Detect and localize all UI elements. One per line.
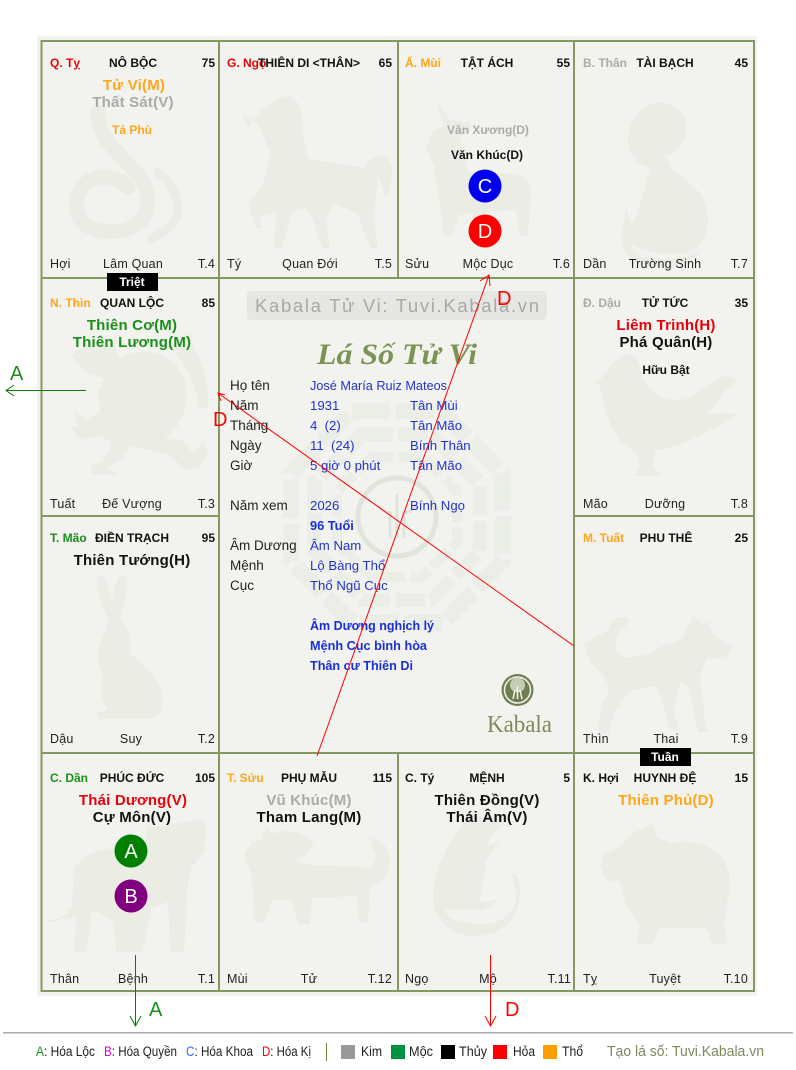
palace: Quan Lộc: T.3 <box>198 497 215 511</box>
badge B: B <box>124 886 138 908</box>
personal info table: 96 Tuổi <box>310 518 354 533</box>
palace: Mệnh: Mộ <box>479 972 497 986</box>
legend: Hóa Kị: D: Hóa Kị <box>262 1044 311 1059</box>
bagua watermark <box>291 411 503 623</box>
palace: Tài Bạch: T.7 <box>731 257 748 271</box>
palace: Tài Bạch <box>583 55 748 271</box>
bagua tree trunk <box>378 494 416 538</box>
palace: Tử Tức: Phá Quân(H) <box>619 334 713 351</box>
palace: Quan Lộc: N. Thìn <box>50 296 91 310</box>
site watermark banner: Kabala Tử Vi: Tuvi.Kabala.vn <box>255 295 539 316</box>
palace: Điền Trạch: 95 <box>202 531 215 545</box>
palace: Huynh Đệ <box>583 770 748 986</box>
palace: Điền Trạch: T. Mão <box>50 531 87 545</box>
legend swatch: Kim: Kim <box>361 1044 382 1059</box>
palace: Phúc Đức: Thân <box>50 972 79 986</box>
palace: Nô Bộc: T.4 <box>198 257 215 271</box>
palace: Phu Thê: Thai <box>653 732 679 746</box>
palace: Phúc Đức: T.1 <box>198 972 215 986</box>
legend swatch: Thổ <box>543 1044 583 1059</box>
zodiac watermark: rat <box>433 810 520 936</box>
palace: Nô Bộc: Q. Tỵ <box>50 56 80 70</box>
palace: Nô Bộc: Tả Phù <box>112 123 152 137</box>
palace: Quan Lộc: Thiên Cơ(M) <box>87 317 177 334</box>
palace: Phụ Mẫu <box>227 770 392 986</box>
palace: Phúc Đức <box>50 770 215 986</box>
personal info table: Thân cư Thiên Di <box>310 658 413 673</box>
palace: Nô Bộc <box>50 55 215 271</box>
palace: Điền Trạch: Thiên Tướng(H) <box>74 552 190 569</box>
personal info table: 2026 <box>310 498 339 513</box>
personal info table: 4 (2) <box>310 418 341 433</box>
zodiac watermark: tiger <box>48 818 206 952</box>
palace: Điền Trạch: ĐIỀN TRẠCH <box>95 530 169 545</box>
palace: Thiên Di: G. Ngọ <box>227 56 266 70</box>
personal info table: Họ tên <box>230 378 270 393</box>
palace: Tật Ách: T.6 <box>553 257 570 271</box>
palace: Phụ Mẫu: Tham Lang(M) <box>257 809 361 826</box>
personal info table: Âm Dương <box>230 538 297 553</box>
arrow label D bottom: D <box>505 999 519 1021</box>
personal info table: Ngày <box>230 438 262 453</box>
palace: Phu Thê: Thìn <box>583 732 609 746</box>
palace: Mệnh: MỆNH <box>469 770 505 785</box>
palace: Huynh Đệ: Tỵ <box>583 972 598 986</box>
palace: Tật Ách: Sửu <box>405 257 429 271</box>
palace: Phu Thê: PHU THÊ <box>640 530 692 545</box>
palace: Nô Bộc: Thất Sát(V) <box>92 94 174 111</box>
legend swatch: Thủy: Thủy <box>459 1044 487 1059</box>
badge C: C <box>478 176 492 198</box>
palace: Tật Ách <box>405 55 570 271</box>
bagua centre medallion <box>358 478 436 556</box>
palace: Quan Lộc: Đế Vượng <box>102 497 162 511</box>
personal info table: Mệnh Cục bình hòa <box>310 638 428 653</box>
palace: Phúc Đức: 105 <box>195 771 215 785</box>
palace: Huynh Đệ: Thiên Phủ(D) <box>618 792 714 809</box>
personal info table: Tân Mão <box>410 418 462 433</box>
Kabala logo <box>487 674 552 738</box>
palace: Phu Thê: T.9 <box>731 732 748 746</box>
palace: Phúc Đức: Cự Môn(V) <box>93 809 171 826</box>
palace: Điền Trạch: T.2 <box>198 732 215 746</box>
personal info table: Âm Dương nghịch lý <box>310 618 435 633</box>
palace: Thiên Di: 65 <box>379 56 392 70</box>
zodiac watermark: dog <box>584 614 732 734</box>
palace: Tật Ách: TẬT ÁCH <box>461 55 513 70</box>
palace: Tài Bạch: 45 <box>735 56 748 70</box>
Kabala logo: Kabala <box>487 712 552 738</box>
arrow: red diagonal to Tật Ách <box>317 275 490 756</box>
zodiac watermark: dragon <box>70 336 208 474</box>
palace: Tử Tức: Hữu Bật <box>642 363 690 377</box>
palace: Điền Trạch: Dậu <box>50 732 74 746</box>
palace: Quan Lộc: QUAN LỘC <box>100 295 164 310</box>
grid lines <box>41 41 754 991</box>
arrow: green left <box>6 385 86 396</box>
personal info table: Tháng <box>230 418 268 433</box>
personal info table: Năm xem <box>230 498 288 513</box>
palace: Phúc Đức: Bệnh <box>118 972 148 986</box>
bagua middle ring <box>314 434 480 600</box>
arrow label D top: D <box>497 288 511 310</box>
palace: Quan Lộc <box>50 295 215 511</box>
tag: Tuần <box>640 748 691 766</box>
palace: Phu Thê: 25 <box>735 531 748 545</box>
palace: Tử Tức: Liêm Trinh(H) <box>616 317 716 334</box>
palace: Phụ Mẫu: Vũ Khúc(M) <box>266 792 352 809</box>
personal info table: Cục <box>230 578 254 593</box>
site credit: Tạo lá số: Tuvi.Kabala.vn <box>607 1044 764 1060</box>
title: Lá Số Tử Vi <box>316 338 478 371</box>
palace: Tài Bạch: B. Thân <box>583 56 627 70</box>
palace: Huynh Đệ: T.10 <box>724 972 748 986</box>
footer legend <box>36 1043 764 1061</box>
legend swatch: Mộc: Mộc <box>409 1044 433 1059</box>
palace: Phúc Đức: Thái Dương(V) <box>79 792 187 809</box>
tag: Triệt <box>107 273 158 291</box>
legend swatch: Kim <box>341 1044 382 1059</box>
palace: Tật Ách: Mộc Dục <box>463 257 513 271</box>
arrow label D centre: D <box>213 409 227 431</box>
palace: Điền Trạch <box>50 530 215 746</box>
personal info table: 11 (24) <box>310 438 354 453</box>
palace: Huynh Đệ: 15 <box>735 771 748 785</box>
palace: Tử Tức: Mão <box>583 497 608 511</box>
badge A <box>114 834 148 868</box>
palace: Tử Tức <box>583 295 748 511</box>
palace: Mệnh: Ngọ <box>405 972 429 986</box>
personal info table: 5 giờ 0 phút <box>310 458 381 473</box>
personal info table: Mệnh <box>230 558 264 573</box>
legend swatch: Thổ: Thổ <box>562 1044 583 1059</box>
personal info table: Năm <box>230 398 259 413</box>
palace: Phụ Mẫu: T. Sửu <box>227 771 264 785</box>
palace: Phu Thê: M. Tuất <box>583 531 624 545</box>
personal info table: Bính Ngọ <box>410 498 465 513</box>
legend: Hóa Lộc: A: Hóa Lộc <box>36 1044 95 1059</box>
zodiac watermark: goat <box>426 102 531 236</box>
palace: Tật Ách: Văn Xương(D) <box>447 123 529 137</box>
palace: Phúc Đức: C. Dần <box>50 771 88 785</box>
personal info table <box>230 378 471 673</box>
palace: Mệnh <box>405 770 571 986</box>
palace: Nô Bộc: 75 <box>202 56 215 70</box>
badge B <box>114 880 148 912</box>
palace: Thiên Di: THIÊN DI <THÂN> <box>258 55 360 70</box>
palace: Phụ Mẫu: PHỤ MẪU <box>281 770 337 785</box>
personal info table: José María Ruiz Mateos <box>310 378 447 393</box>
badge C <box>468 170 502 202</box>
zodiac watermark: rabbit <box>96 575 162 719</box>
palace: Điền Trạch: Suy <box>120 732 143 746</box>
personal info table: Tân Mão <box>410 458 462 473</box>
palace: Tật Ách: 55 <box>557 56 570 70</box>
legend swatch: Mộc <box>391 1044 433 1059</box>
palace: Tử Tức: T.8 <box>731 497 748 511</box>
arrow: green down <box>130 955 141 1026</box>
badge D: D <box>478 221 492 243</box>
palace: Huynh Đệ: K. Hợi <box>583 771 619 785</box>
legend: Hóa Khoa: C: Hóa Khoa <box>186 1044 253 1059</box>
palace: Nô Bộc: Tử Vi(M) <box>103 77 165 94</box>
palace: Phúc Đức: PHÚC ĐỨC <box>100 770 165 785</box>
legend swatch: Thủy <box>441 1044 487 1059</box>
palace: Tài Bạch: Dần <box>583 257 607 271</box>
tag: Triệt: Triệt <box>119 275 145 289</box>
palace: Mệnh: 5 <box>563 771 570 785</box>
palace: Phụ Mẫu: 115 <box>373 771 392 785</box>
zodiac watermark: ox <box>244 826 390 924</box>
bagua outer ring <box>291 411 503 623</box>
palace: Tật Ách: Ấ. Mùi <box>405 55 441 70</box>
palace: Thiên Di: Quan Đới <box>282 257 338 271</box>
arrow label A left: A <box>10 363 24 385</box>
palace: Nô Bộc: Hợi <box>50 257 71 271</box>
zodiac watermark: monkey <box>622 103 708 266</box>
personal info table: Bính Thân <box>410 438 471 453</box>
palace: Phụ Mẫu: Tử <box>301 972 317 986</box>
palace: Thiên Di <box>227 55 392 271</box>
zodiac watermark: snake <box>76 112 178 238</box>
zodiac watermark: dragon tail <box>170 333 208 409</box>
palace: Nô Bộc: Lâm Quan <box>103 257 163 271</box>
palace: Tài Bạch: Trường Sinh <box>629 257 701 271</box>
tag: Tuần: Tuần <box>651 750 679 764</box>
zodiac watermark: rooster <box>596 354 738 476</box>
palace: Huynh Đệ: Tuyệt <box>649 972 681 986</box>
legend swatch: Hỏa <box>493 1044 535 1059</box>
personal info table: Tân Mùi <box>410 398 458 413</box>
arrow label A bottom: A <box>149 999 163 1021</box>
palace: Tử Tức: Đ. Dậu <box>583 296 621 310</box>
palace: Tài Bạch: TÀI BẠCH <box>636 55 694 70</box>
palace: Phụ Mẫu: T.12 <box>368 972 392 986</box>
palace: Thiên Di: Tý <box>227 257 242 271</box>
palace: Tật Ách: Văn Khúc(D) <box>451 148 523 162</box>
personal info table: Lộ Bàng Thổ <box>310 558 385 573</box>
arrow: red down <box>485 955 496 1026</box>
personal info table: 1931 <box>310 398 339 413</box>
palace: Quan Lộc: Tuất <box>50 497 76 511</box>
site watermark banner <box>247 291 547 320</box>
legend: Hóa Quyền: B: Hóa Quyền <box>104 1044 177 1059</box>
palace: Tử Tức: Dưỡng <box>645 497 685 511</box>
palace: Quan Lộc: 85 <box>202 296 215 310</box>
personal info table: Âm Nam <box>310 538 361 553</box>
zodiac watermark: pig <box>600 822 730 944</box>
palace: Phu Thê <box>583 530 748 746</box>
palace: Mệnh: T.11 <box>548 972 571 986</box>
badge D <box>468 214 502 248</box>
personal info table: Giờ <box>230 458 252 473</box>
palace: Phụ Mẫu: Mùi <box>227 972 248 986</box>
palace: Mệnh: Thiên Đồng(V) <box>434 792 540 809</box>
legend swatch: Hỏa: Hỏa <box>513 1044 535 1059</box>
footer rule <box>3 1032 793 1034</box>
zodiac watermark: horse <box>242 96 392 248</box>
palace: Huynh Đệ: HUYNH ĐỆ <box>634 770 696 785</box>
palace: Nô Bộc: NÔ BỘC <box>109 55 157 70</box>
palace: Mệnh: C. Tý <box>405 771 435 785</box>
personal info table: Thổ Ngũ Cục <box>310 578 388 593</box>
palace: Tử Tức: 35 <box>735 296 748 310</box>
palace: Thiên Di: T.5 <box>375 257 392 271</box>
badge A: A <box>124 841 138 863</box>
arrow: red diagonal to Quan Lộc <box>218 393 574 646</box>
bagua inner ring <box>337 457 457 577</box>
palace: Quan Lộc: Thiên Lương(M) <box>73 334 191 351</box>
palace: Mệnh: Thái Âm(V) <box>446 808 528 826</box>
palace: Tử Tức: TỬ TỨC <box>642 295 689 310</box>
